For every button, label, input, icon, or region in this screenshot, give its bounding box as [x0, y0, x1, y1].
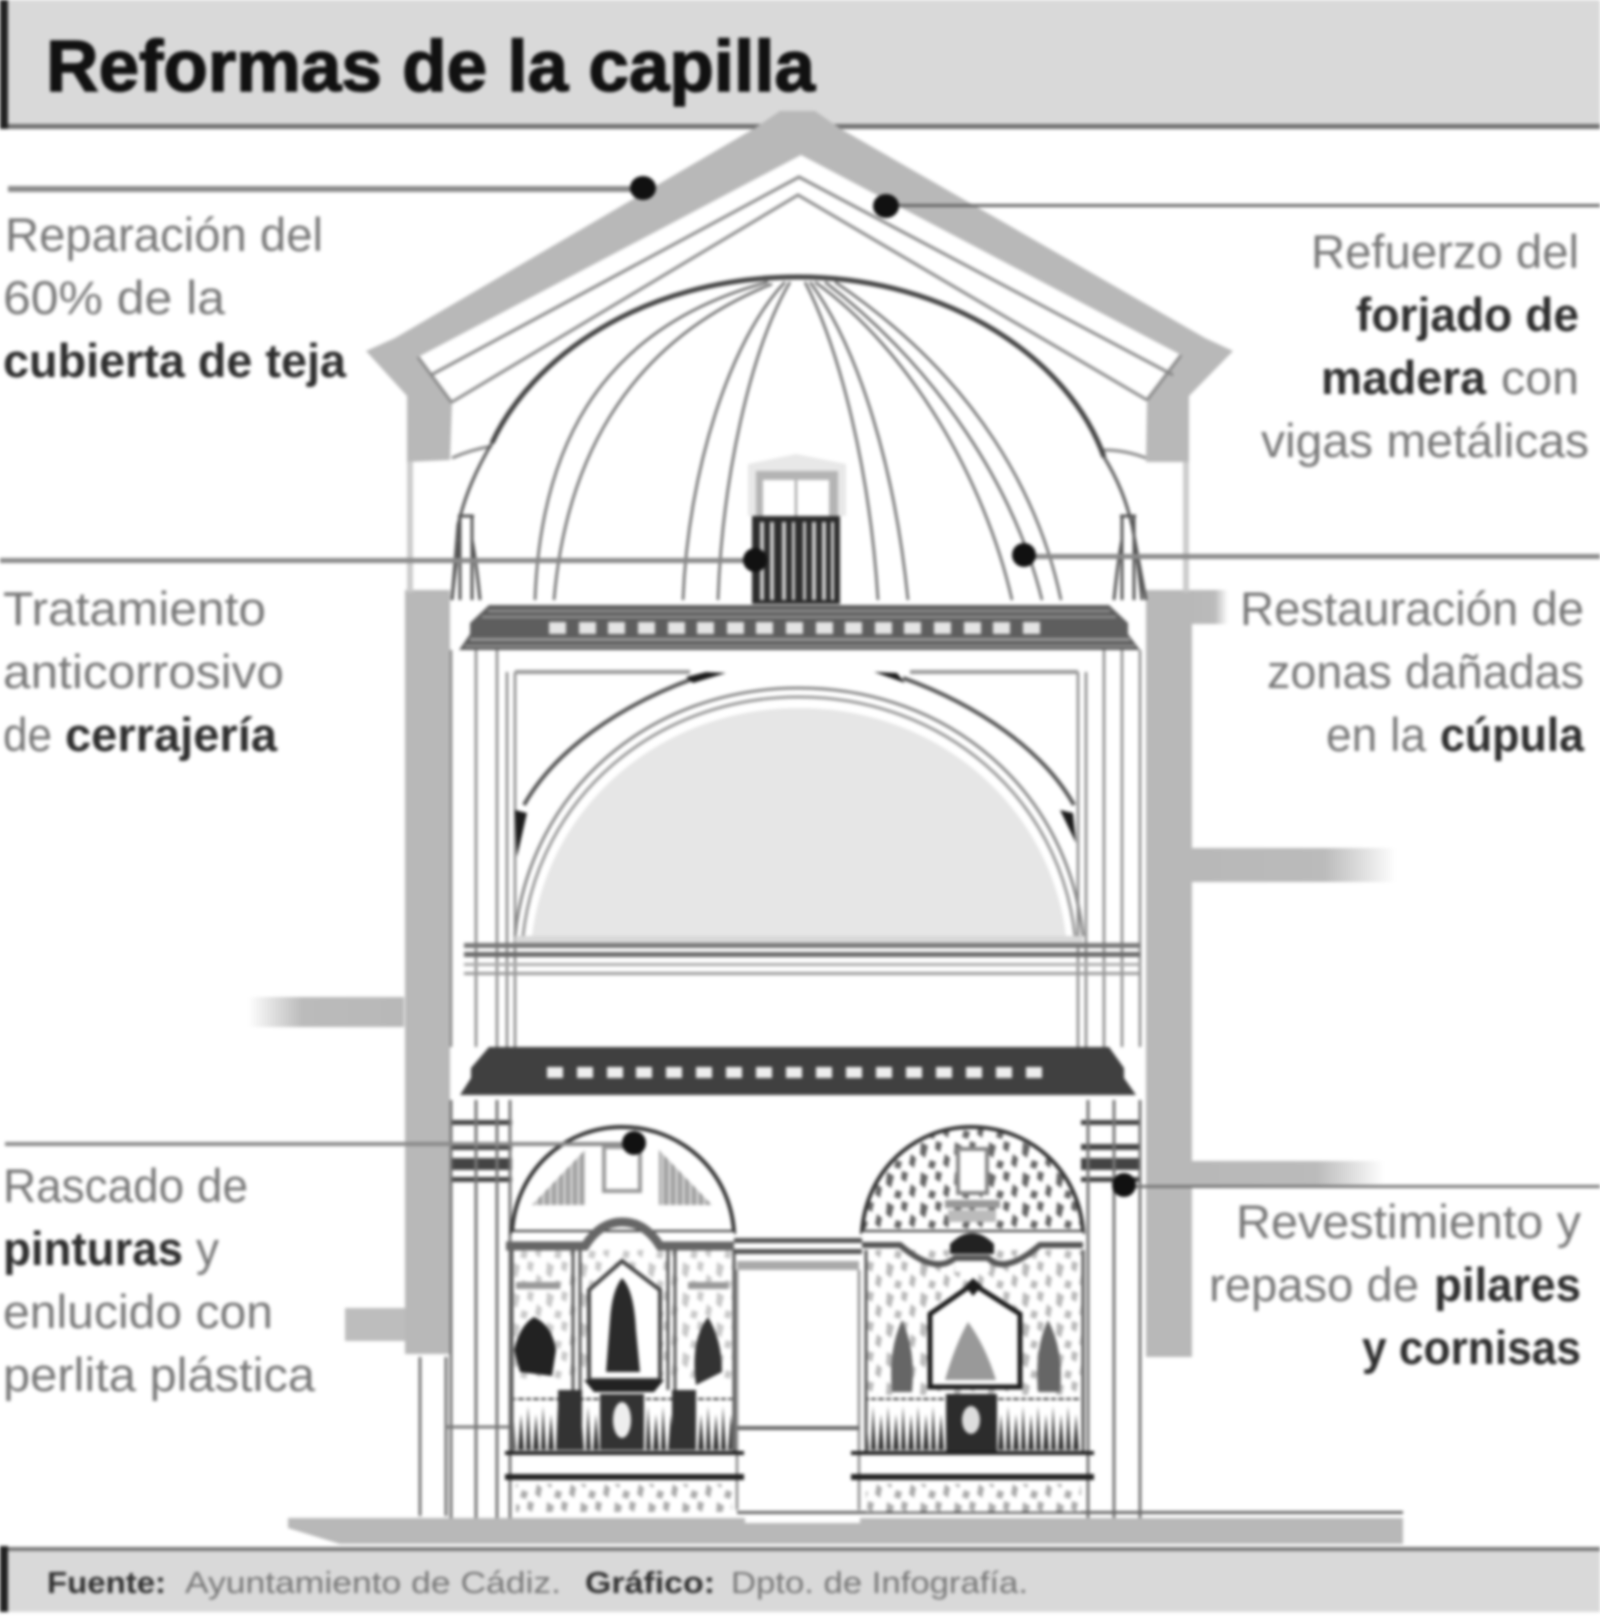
label: cerrajeria — [3, 582, 284, 761]
roof — [366, 111, 1233, 462]
left altar — [505, 1127, 744, 1512]
central arch — [464, 672, 1140, 975]
header panel — [0, 0, 1600, 129]
label: pinturas: pinturas — [3, 1222, 183, 1275]
lower cornice — [460, 1047, 1136, 1095]
label: cerrajeria: anticorrosivo — [3, 645, 284, 698]
leader: cupula — [1012, 543, 1600, 567]
label: pilares y cornisas: repaso de — [1209, 1258, 1419, 1311]
leader: pinturas — [5, 1131, 646, 1155]
label: forjado de madera: madera — [1321, 351, 1487, 404]
leader: forjado — [873, 194, 1600, 218]
source credits — [47, 1565, 1028, 1600]
label: cupula — [1240, 582, 1585, 761]
label: forjado de madera: Refuerzo del — [1311, 225, 1579, 278]
source credits: Fuente: — [47, 1565, 166, 1600]
label: forjado de madera: vigas metálicas — [1261, 414, 1589, 467]
roof lines — [418, 177, 1181, 458]
lower columns — [420, 1100, 1140, 1518]
pinnacles — [452, 516, 1142, 600]
label: cupula: Restauración de — [1240, 582, 1584, 635]
label: cubierta de teja: 60% de la — [3, 271, 226, 324]
gray walls — [405, 462, 1192, 1357]
label: cupula: en la — [1326, 708, 1427, 761]
leader: cubierta — [8, 176, 656, 200]
label: forjado de madera: forjado de — [1356, 288, 1579, 341]
label: pilares y cornisas: y cornisas — [1362, 1321, 1581, 1374]
source credits: Ayuntamiento de Cádiz. — [185, 1565, 561, 1600]
upper columns — [451, 650, 1140, 1047]
label: forjado de madera: con — [1501, 351, 1579, 404]
label: cerrajeria: de — [3, 708, 52, 761]
upper cornice — [459, 605, 1140, 650]
wall stub bars — [248, 590, 1396, 1341]
label: pilares y cornisas — [1209, 1195, 1582, 1374]
label: pinturas: enlucido con — [3, 1285, 273, 1338]
title: Reformas de la capilla — [46, 27, 816, 107]
footer panel — [0, 1546, 1600, 1612]
label: pilares y cornisas: Revestimiento y — [1236, 1195, 1582, 1248]
label: pinturas: perlita plástica — [3, 1348, 316, 1401]
label: cupula: zonas dañadas — [1267, 645, 1584, 698]
label: cerrajeria: Tratamiento — [3, 582, 266, 635]
label: pilares y cornisas: pilares — [1434, 1258, 1581, 1311]
source credits: Dpto. de Infografía. — [731, 1565, 1028, 1600]
label: cubierta de teja: cubierta de teja — [3, 334, 347, 387]
window with grille — [748, 454, 846, 604]
label: forjado de madera — [1261, 225, 1589, 467]
statues — [606, 1278, 640, 1372]
label: cupula: cúpula — [1440, 708, 1585, 761]
statues — [945, 1322, 996, 1380]
label: cubierta de teja — [3, 208, 347, 387]
central passage — [726, 1238, 1403, 1514]
label: pinturas — [3, 1159, 316, 1401]
dome — [452, 277, 1146, 600]
leader: cerrajeria — [0, 548, 767, 572]
label: cubierta de teja: Reparación del — [5, 208, 323, 261]
building section drawing — [248, 111, 1403, 1544]
label: cerrajeria: cerrajería — [65, 708, 278, 761]
leader: pilares — [1112, 1173, 1600, 1197]
label: pinturas: y — [196, 1222, 219, 1275]
right altar — [851, 1127, 1094, 1512]
label: pinturas: Rascado de — [3, 1159, 248, 1212]
source credits: Gráfico: — [585, 1565, 715, 1600]
pedestal — [288, 1518, 1403, 1544]
